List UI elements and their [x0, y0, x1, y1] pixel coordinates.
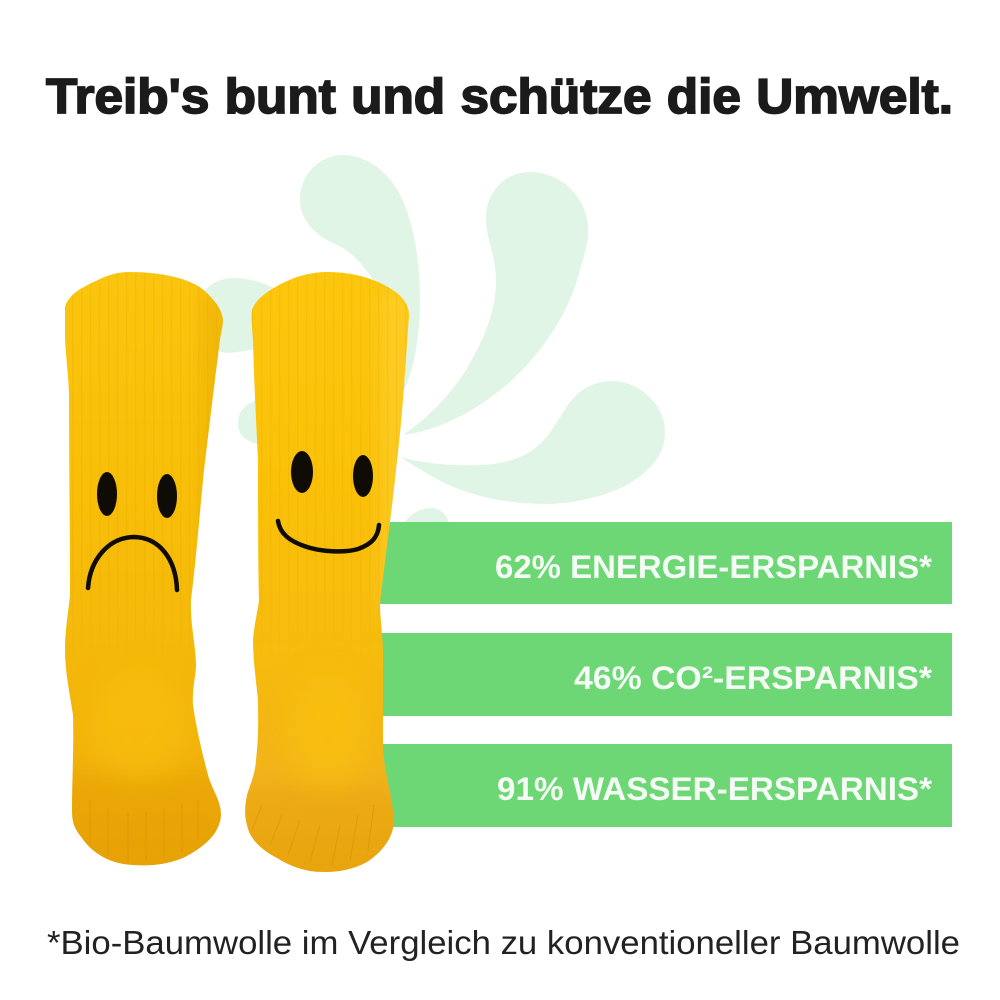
- footnote: *Bio-Baumwolle im Vergleich zu konventioneller Baumwolle: [47, 924, 960, 961]
- sad sock: [60, 265, 230, 875]
- bar: water saving: 91% WASSER-ERSPARNIS*: [497, 771, 933, 807]
- sad mouth: [88, 537, 177, 590]
- sad eyes: [97, 472, 177, 518]
- happy eyes: [291, 451, 373, 497]
- title: Treib's bunt und schütze die Umwelt.: [46, 70, 953, 124]
- happy mouth: [278, 521, 379, 551]
- bar: energy saving: [380, 522, 952, 604]
- bar: CO2 saving: 46% CO²-ERSPARNIS*: [574, 660, 933, 696]
- bar: CO2 saving: [380, 633, 952, 716]
- bar: water saving: [380, 744, 952, 827]
- happy sock: [240, 265, 415, 880]
- bar: energy saving: 62% ENERGIE-ERSPARNIS*: [495, 549, 933, 585]
- splash shape behind socks: [200, 155, 665, 524]
